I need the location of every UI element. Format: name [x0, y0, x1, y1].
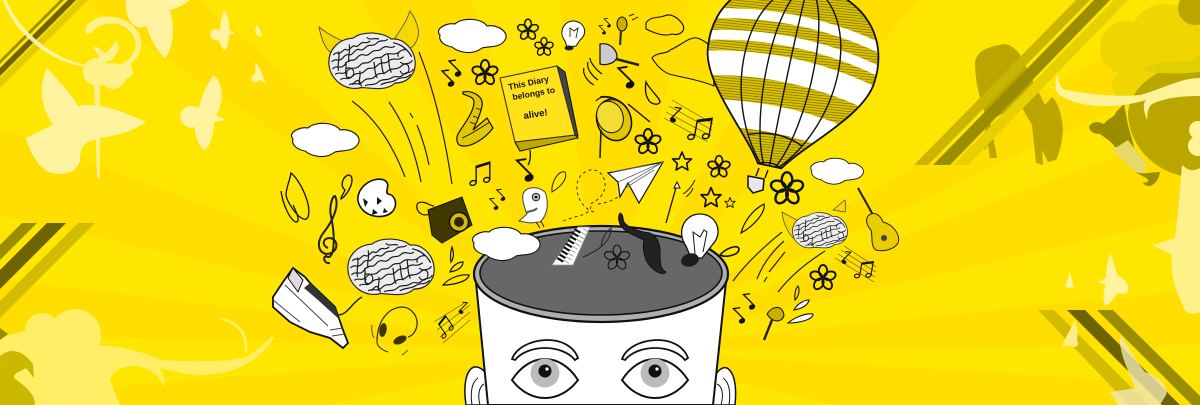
icon: camera strap — [417, 202, 434, 215]
icon: staff and notes right — [835, 246, 876, 282]
diary book: alive! — [523, 107, 548, 122]
cloud right — [811, 158, 863, 184]
decoration: top-left swirl and rooster cloud — [3, 0, 141, 178]
icon: small light bulb — [562, 21, 585, 50]
diary book — [500, 66, 578, 165]
bird silhouette: big right — [1152, 165, 1200, 314]
icon: treble clef — [319, 196, 337, 263]
rim — [474, 226, 728, 322]
icon: headphones — [372, 307, 417, 355]
right eyebrow — [622, 340, 688, 360]
cable from shuttle to brain — [338, 297, 362, 315]
bird silhouette: right tiny — [1065, 272, 1074, 288]
inner head dark opening — [480, 231, 722, 315]
icon: music notes top-left — [442, 60, 462, 88]
bird silhouette: stripe small — [1062, 320, 1078, 347]
icon: pencil — [666, 184, 677, 223]
motion lines left — [352, 52, 452, 184]
right eye — [622, 358, 688, 398]
icon: notes right — [733, 294, 756, 324]
icon: camera — [428, 197, 472, 243]
icon: handle loop — [596, 97, 612, 101]
icon: small notes top — [599, 18, 611, 35]
left ear — [465, 367, 490, 405]
left eyebrow — [512, 340, 578, 360]
icon: bell handle — [600, 44, 639, 65]
right ear — [712, 368, 736, 405]
decoration: deer silhouette — [975, 44, 1063, 165]
icon: leaf drop top — [645, 82, 660, 104]
bird silhouette: tiny lower — [252, 62, 266, 84]
icon: drum — [591, 94, 650, 146]
icon: drum stick — [600, 130, 601, 158]
flowers — [471, 19, 837, 291]
cloud top — [438, 19, 506, 53]
cloud on head — [472, 227, 540, 261]
silhouette: horse bottom-left — [0, 351, 35, 405]
icon: beamed note — [469, 162, 490, 186]
icon: large light bulb — [680, 214, 718, 269]
winged brain right — [782, 200, 847, 248]
decoration: right pale swirl — [1045, 72, 1200, 156]
icon: ear loop on rim — [720, 247, 739, 256]
cloud outline small — [646, 15, 684, 35]
left eye — [512, 358, 578, 398]
stars — [672, 152, 735, 207]
icon: small notes — [490, 189, 506, 211]
decoration: right cloud and dark circle — [1100, 0, 1200, 178]
icon: staff and notes by balloon — [664, 100, 713, 144]
bird silhouette: small — [210, 10, 235, 50]
icon: drops right — [788, 286, 813, 323]
icon: pencil tip — [674, 182, 680, 188]
diary book: belongs to — [512, 85, 556, 102]
decoration: floral ornament — [1089, 104, 1160, 186]
icon: paper plane — [608, 162, 663, 203]
decoration: bottom-left pale cloud and swirl — [0, 309, 274, 405]
bird silhouette: right small — [1098, 253, 1128, 305]
hot air balloon — [706, 0, 880, 170]
brain left — [348, 239, 434, 295]
icon: moustache — [619, 213, 666, 273]
icon: leaf drop right — [741, 204, 764, 233]
decoration: top-right stripes — [914, 0, 1128, 165]
decoration: top-left stripes — [0, 0, 88, 88]
bird silhouette: tiny — [255, 24, 262, 37]
icon: drops left — [443, 247, 469, 285]
icon: rattle top — [617, 14, 638, 45]
decoration: bottom-right stripes — [1038, 310, 1200, 405]
balloon basket — [748, 168, 768, 193]
icon: teardrop loops left — [281, 173, 352, 222]
icon: small maraca — [764, 307, 784, 340]
icon: little bird — [519, 188, 547, 228]
icon: note upper centre — [618, 67, 635, 90]
icon: staff and notes left — [432, 302, 470, 343]
winged brain top — [319, 11, 418, 89]
bird silhouette: crow — [180, 75, 226, 150]
icon: piano keyboard — [552, 227, 590, 265]
icon: small arcs — [683, 180, 695, 197]
icon: paint palette — [358, 179, 395, 217]
decoration: left stripes — [0, 223, 95, 340]
bird silhouette: large dove — [26, 68, 146, 174]
icon: guitar — [858, 188, 899, 251]
icon: thin curl on head — [583, 228, 611, 257]
bird silhouette: over stripes — [1110, 335, 1167, 405]
bird silhouette: top-centre — [126, 0, 190, 58]
icon: thick eighth note — [517, 159, 535, 183]
icon: sound arcs — [584, 58, 602, 85]
head: open-top head with face — [465, 226, 736, 405]
icon: speech bubble — [552, 172, 566, 192]
dashed flight path — [563, 170, 618, 221]
icon: saxophone — [457, 92, 493, 146]
cloud outline behind balloon — [652, 38, 714, 86]
motion lines right — [733, 232, 825, 292]
diary book: This Diary — [507, 74, 550, 92]
face skull — [475, 272, 727, 405]
icon: flower on head — [603, 245, 631, 271]
icon: space shuttle — [273, 268, 348, 348]
cloud left — [291, 123, 359, 157]
